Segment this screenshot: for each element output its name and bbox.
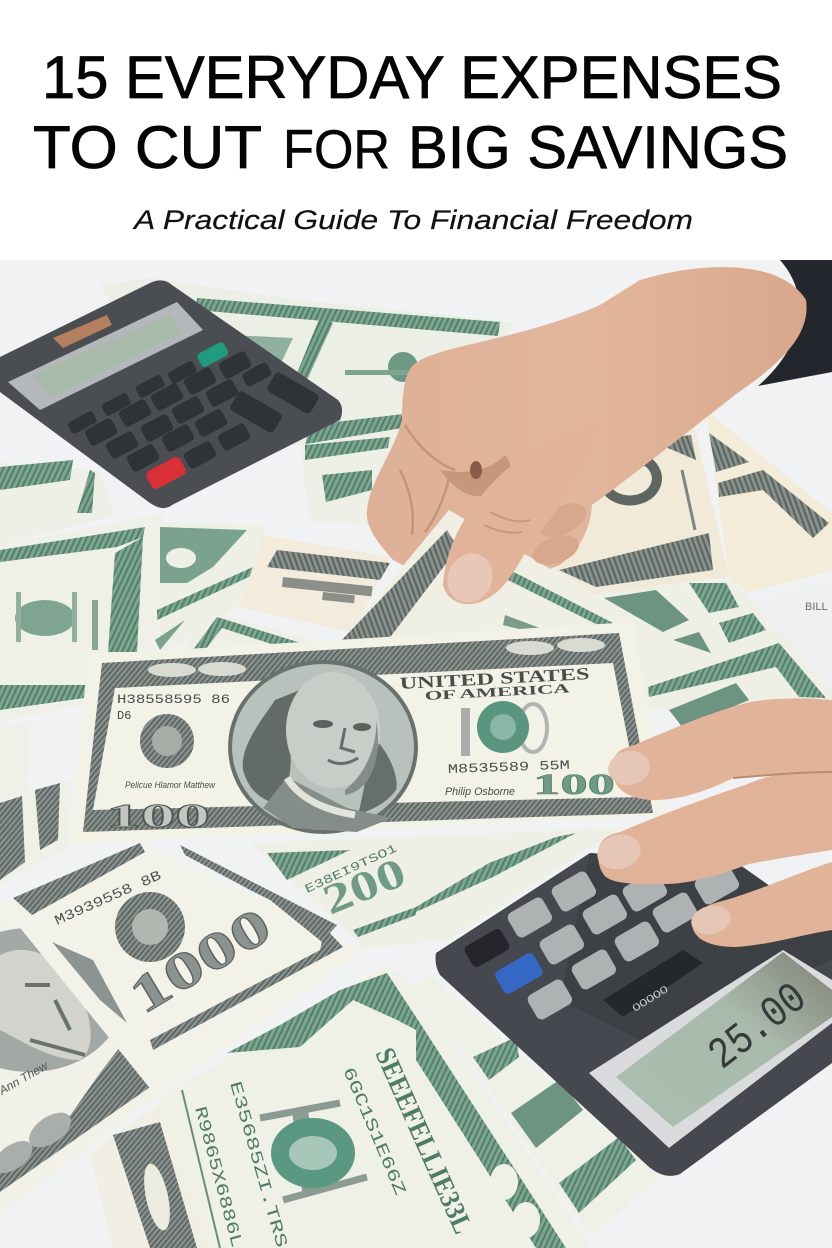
bill: bottom left grey: 1000 <box>120 897 281 1025</box>
bill: bottom small cream <box>90 1103 225 1248</box>
bill lettering: OF AMERICA <box>424 680 571 703</box>
hand: thumb and nail <box>439 420 600 610</box>
bill: behind top calculator <box>100 278 512 445</box>
bill: between main and bottom calculator: E38EI9TSO1 <box>303 842 399 897</box>
bill: under bottom calculator <box>416 975 660 1237</box>
document: right edge: BILL <box>805 601 828 613</box>
title line 1: 15 EVERYDAY EXPENSES <box>42 44 782 111</box>
green key <box>196 341 230 368</box>
bill lettering: H38558595 86 <box>117 692 230 707</box>
hand: lower right fingers <box>593 698 832 947</box>
finger gap shadow <box>733 772 832 778</box>
portrait <box>230 662 416 832</box>
red key <box>145 455 187 491</box>
document: right edge <box>750 575 832 700</box>
calculator: top left <box>0 280 342 508</box>
bill: centre left green <box>155 522 265 655</box>
bill: small under cream <box>178 612 330 660</box>
photo: money and calculators <box>0 260 832 1248</box>
keys <box>67 350 320 473</box>
bill lettering: D6 <box>117 709 131 723</box>
bill: middle right <box>599 580 832 728</box>
seal <box>140 714 194 768</box>
top ovals <box>148 638 605 677</box>
sleeve <box>650 260 832 386</box>
bills: lower left strips <box>0 722 72 885</box>
blue key <box>493 951 544 996</box>
calculator: bottom right <box>436 853 832 1176</box>
bill: bottom left grey: M3939558 8B <box>53 868 164 930</box>
bill: cream centre <box>240 535 390 633</box>
bill lettering: UNITED STATES <box>399 664 590 693</box>
calculator: bottom right: 25.00 <box>700 974 817 1081</box>
black key <box>463 927 511 969</box>
bill: bottom left grey <box>0 843 363 1097</box>
bills: left side <box>0 460 163 722</box>
bill: bottom centre green: R9865X6886L <box>189 1105 245 1248</box>
bill lettering: 100 <box>106 798 210 835</box>
bill: bottom centre green: 6GC1S1E66Z <box>337 1065 408 1198</box>
finger 3 <box>692 862 832 947</box>
bill lettering: M8535589 55M <box>448 758 570 777</box>
calculator keys <box>506 862 741 1022</box>
finger 1 <box>612 698 832 800</box>
bill: between main and bottom calculator <box>250 828 620 948</box>
bill: bottom centre green: E35685ZI.TRS <box>224 1079 290 1248</box>
calculator: bottom right: 00000 <box>631 984 671 1015</box>
bill lettering <box>106 664 615 835</box>
title line 2: BIG SAVINGS <box>408 114 788 181</box>
nails <box>605 747 653 789</box>
bill lettering: Pelicue Hlamor Matthew <box>125 780 215 790</box>
title line 2: FOR <box>283 118 390 180</box>
finger 2 <box>598 768 832 884</box>
header panel <box>0 0 832 260</box>
bill: between main and bottom calculator: 200 <box>317 850 413 924</box>
hand: top right body and sleeve <box>367 260 832 600</box>
bill: far left with portrait <box>0 905 157 1215</box>
green treasury seal <box>461 701 547 756</box>
title line 2: TO CUT <box>33 114 262 181</box>
title line 2 <box>33 114 788 181</box>
bill: bottom centre green <box>160 965 592 1248</box>
bill: below hand left <box>300 425 420 525</box>
subtitle: A Practical Guide To Financial Freedom <box>132 205 693 235</box>
bill lettering: 100 <box>533 768 615 801</box>
main 100 dollar bill <box>70 622 668 845</box>
bill: held by hand <box>335 510 690 650</box>
table surface <box>0 260 832 1248</box>
bill lettering: Philip Osborne <box>445 786 515 798</box>
bill: right behind hand <box>555 410 832 595</box>
